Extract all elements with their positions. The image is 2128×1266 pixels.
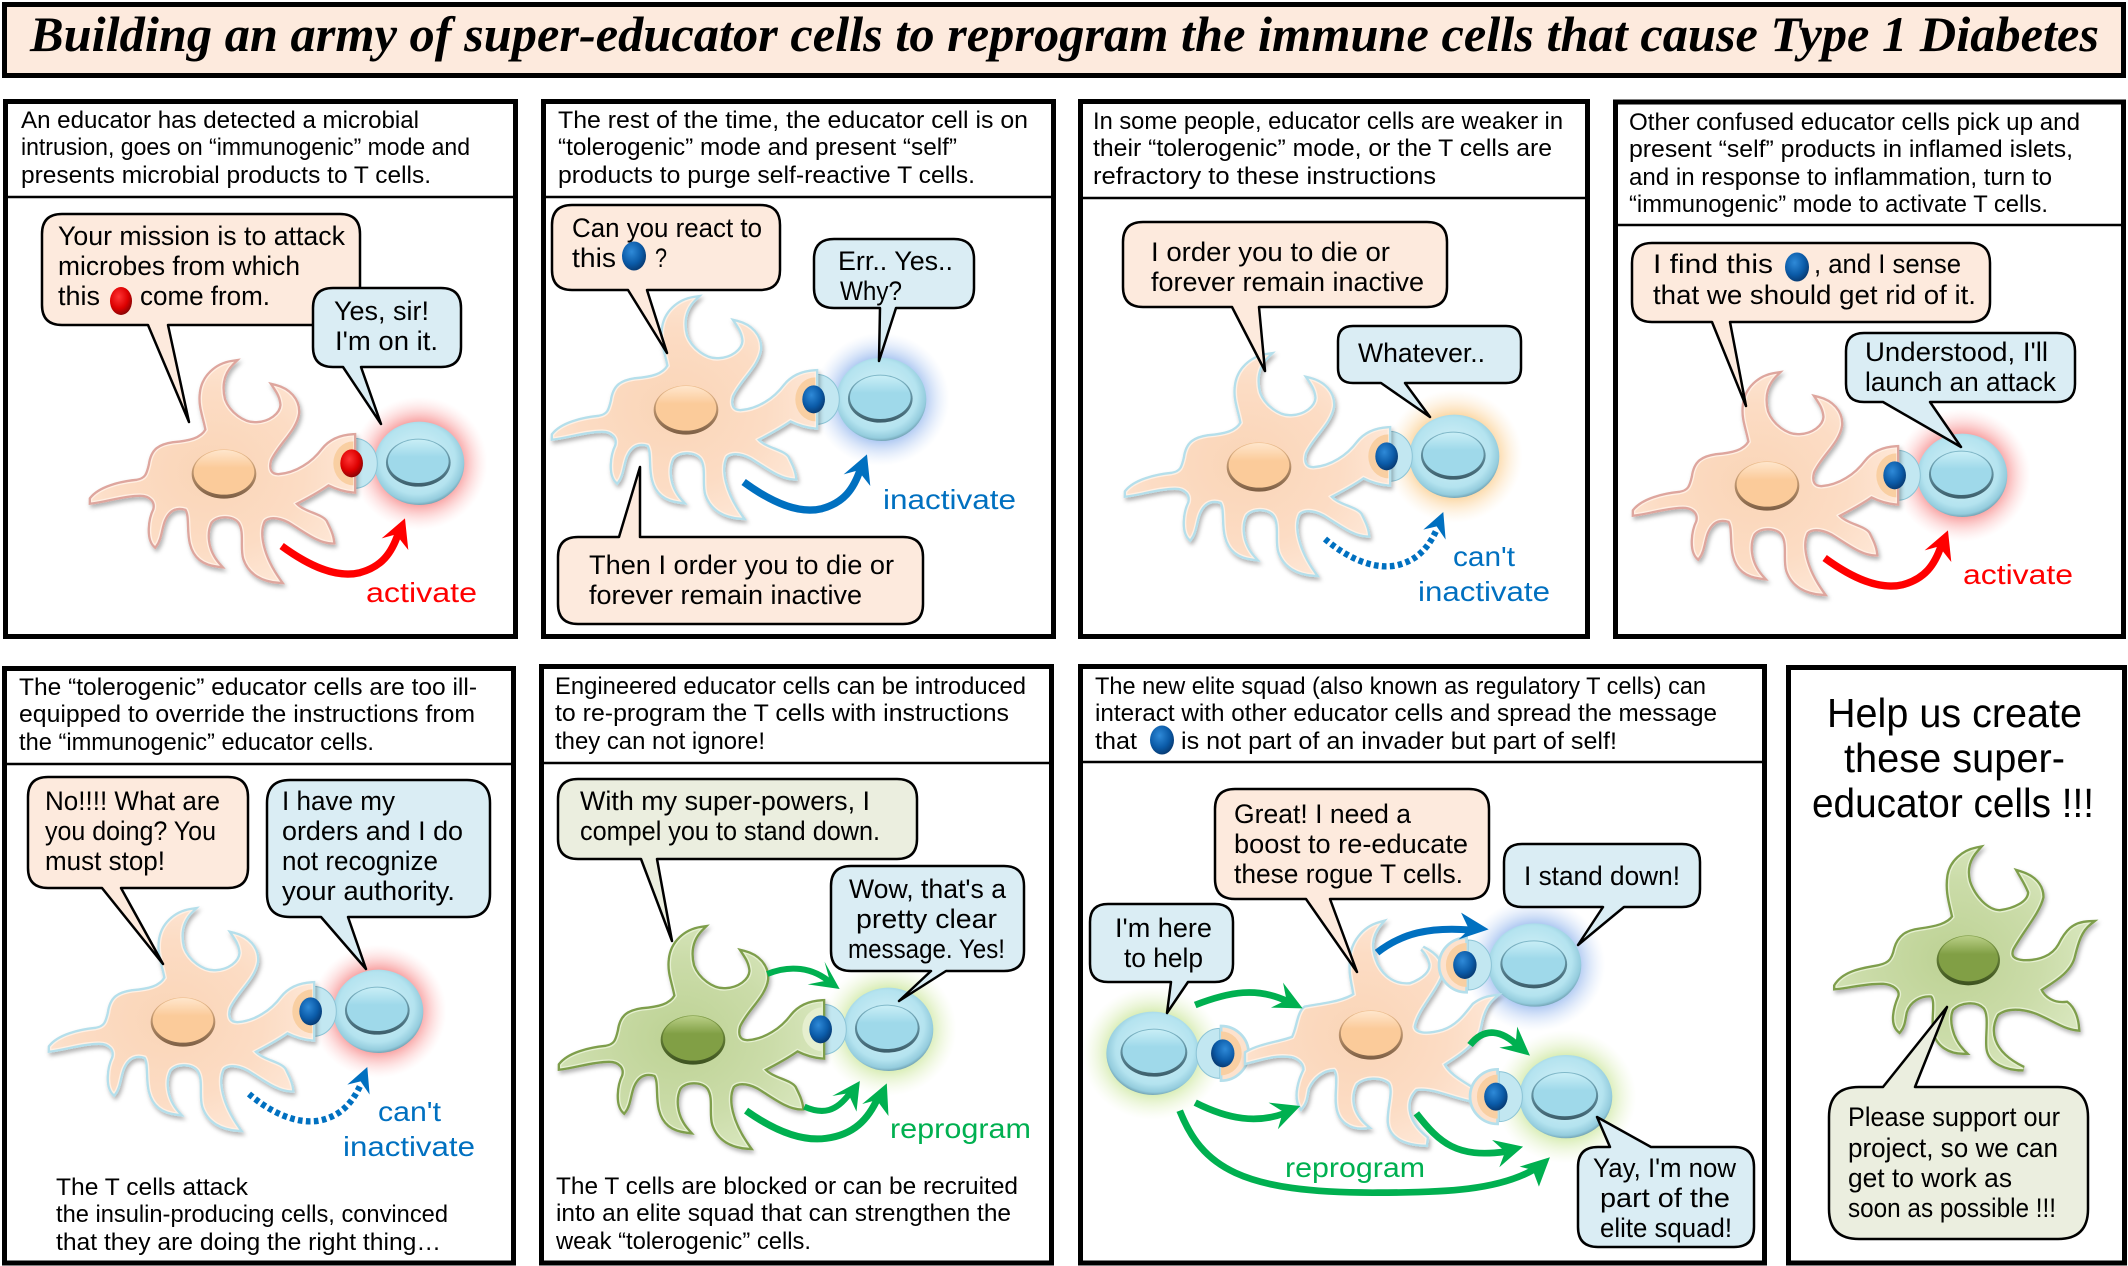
speech bubble: order to die: I order you to die or bbox=[1151, 237, 1390, 267]
speech bubble: please support: soon as possible !!! bbox=[1848, 1193, 2056, 1223]
speech bubble: order to die bbox=[558, 467, 923, 624]
speech bubble: please support bbox=[1829, 1007, 2088, 1239]
speech bubble: order to die: forever remain inactive bbox=[1151, 267, 1424, 297]
panel: ill-equipped tolerogenic cells bbox=[4, 668, 514, 1263]
speech bubble: great boost: boost to re-educate bbox=[1234, 829, 1468, 859]
speech bubble: I have my orders: not recognize bbox=[282, 846, 438, 876]
speech bubble: I'm here to help: I'm here bbox=[1115, 913, 1212, 943]
speech bubble: wow clear message bbox=[831, 866, 1024, 1001]
speech bubble: get rid of it: I find this bbox=[1653, 249, 1773, 279]
T cell group: upper, blue glow bbox=[1464, 898, 1605, 1032]
speech bubble: elite squad: part of the bbox=[1600, 1183, 1730, 1213]
caption: educator detects microbe bbox=[21, 107, 470, 189]
label: activate: activate bbox=[1963, 559, 2073, 590]
speech bubble: can you react bbox=[552, 205, 780, 353]
speech bubble: launch an attack: Understood, I'll bbox=[1865, 337, 2048, 367]
speech bubble: super-powers: compel you to stand down. bbox=[580, 816, 880, 846]
panel: call to action bbox=[1788, 668, 2124, 1263]
caption: confused educators: present “self” products in inflamed islets, bbox=[1629, 136, 2073, 163]
caption: too ill-equipped bbox=[19, 674, 477, 756]
caption: weaker tolerogenic mode: refractory to these instructions bbox=[1093, 163, 1436, 190]
speech bubble: I have my orders: your authority. bbox=[282, 876, 455, 906]
icon: educator cell with T cell, inactivating bbox=[554, 299, 950, 517]
label: can't inactivate: can't bbox=[378, 1096, 441, 1127]
label: inactivate: inactivate bbox=[883, 484, 1016, 515]
heading: help us create: these super- bbox=[1844, 735, 2065, 781]
heading: help us create: educator cells !!! bbox=[1812, 780, 2094, 826]
speech bubble: order to die bbox=[1123, 222, 1447, 371]
label: reprogram: reprogram bbox=[1285, 1152, 1425, 1183]
speech bubble: super-powers: With my super-powers, I bbox=[580, 786, 870, 816]
speech bubble: wow clear message: message. Yes! bbox=[848, 934, 1005, 964]
caption: educator detects microbe: An educator has detected a microbial bbox=[21, 107, 419, 134]
speech bubble: wow clear message: Wow, that's a bbox=[849, 874, 1007, 904]
arrow: can't inactivate (dotted) bbox=[1325, 512, 1446, 566]
panel: engineered educator cells bbox=[542, 666, 1052, 1263]
speech bubble: no what are you doing: No!!!! What are bbox=[45, 786, 220, 816]
speech bubble: no what are you doing bbox=[28, 777, 248, 964]
speech bubble: can you react: Can you react to bbox=[572, 213, 762, 243]
caption: tolerogenic mode: The rest of the time, the educator cell is on bbox=[558, 107, 1028, 134]
speech bubble: yes sir: Yes, sir! bbox=[334, 296, 429, 326]
label: can't inactivate: inactivate bbox=[343, 1131, 475, 1162]
caption: elite squad: that bbox=[1095, 728, 1137, 755]
text: T cells attack: the insulin-producing cells, convinced bbox=[56, 1201, 448, 1228]
speech bubble: elite squad bbox=[1578, 1117, 1754, 1247]
caption: engineered cells: Engineered educator cells can be introduced bbox=[555, 673, 1026, 700]
speech bubble: whatever: Whatever.. bbox=[1358, 338, 1485, 368]
speech bubble: mission bbox=[42, 214, 360, 422]
caption: engineered cells: to re-program the T cells with instructions bbox=[555, 700, 1009, 727]
caption: too ill-equipped: equipped to override the instructions from bbox=[19, 701, 475, 728]
label: can't inactivate bbox=[1418, 541, 1550, 607]
speech bubble: I have my orders: orders and I do bbox=[282, 816, 463, 846]
label: reprogram: reprogram bbox=[890, 1113, 1031, 1144]
caption: too ill-equipped: the “immunogenic” educator cells. bbox=[19, 729, 374, 756]
caption: elite squad: interact with other educator cells and spread the message bbox=[1095, 700, 1717, 727]
caption: tolerogenic mode: products to purge self-reactive T cells. bbox=[558, 162, 975, 189]
speech bubble: mission: Your mission is to attack bbox=[58, 221, 345, 251]
speech bubble: mission: this bbox=[58, 281, 100, 311]
heading: help us create: Help us create bbox=[1827, 690, 2082, 736]
speech bubble: elite squad: elite squad! bbox=[1600, 1213, 1732, 1243]
caption: confused educators: and in response to inflammation, turn to bbox=[1629, 164, 2052, 191]
arrow: activate bbox=[1825, 530, 1951, 586]
speech bubble: please support: project, so we can bbox=[1848, 1133, 2058, 1163]
text: T cells attack: The T cells attack bbox=[56, 1174, 249, 1201]
caption: tolerogenic mode bbox=[558, 107, 1028, 189]
arrow: can't inactivate (dotted) bbox=[249, 1067, 370, 1121]
label: can't inactivate: can't bbox=[1453, 541, 1515, 572]
speech bubble: order to die: forever remain inactive bbox=[589, 580, 862, 610]
panel: microbial intrusion bbox=[6, 102, 516, 636]
label: can't inactivate bbox=[343, 1096, 475, 1162]
caption: too ill-equipped: The “tolerogenic” educator cells are too ill- bbox=[19, 674, 477, 701]
caption: tolerogenic mode: “tolerogenic” mode and present “self” bbox=[558, 134, 957, 161]
educator cell body bbox=[1247, 924, 1493, 1144]
speech bubble: wow clear message: pretty clear bbox=[856, 904, 997, 934]
speech bubble: can you react: this bbox=[572, 243, 616, 273]
speech bubble: get rid of it: that we should get rid of it. bbox=[1653, 280, 1976, 310]
speech bubble: I have my orders: I have my bbox=[282, 786, 395, 816]
speech bubble: please support: get to work as bbox=[1848, 1163, 2012, 1193]
cup: lower contact bbox=[1470, 1069, 1508, 1124]
caption: elite squad: The new elite squad (also known as regulatory T cells) can bbox=[1095, 673, 1706, 700]
arrow: inactivate bbox=[744, 454, 870, 510]
arrow: activate bbox=[282, 518, 408, 574]
caption: educator detects microbe: intrusion, goes on “immunogenic” mode and bbox=[21, 134, 470, 161]
speech bubble: whatever bbox=[1338, 326, 1521, 417]
speech bubble: mission: come from. bbox=[140, 281, 270, 311]
icon: tolerogenic educator cell with active T cell bbox=[51, 911, 447, 1129]
panel: tolerogenic mode bbox=[544, 102, 1054, 636]
speech bubble: super-powers bbox=[558, 779, 917, 941]
speech bubble: great boost: Great! I need a bbox=[1234, 799, 1412, 829]
T cell group: lower, green glow bbox=[1495, 1030, 1636, 1163]
speech bubble: mission: microbes from which bbox=[58, 251, 300, 281]
title: Building an army of super-educator cells to reprogram the immune cells that cause Type 1 Diabetes bbox=[29, 6, 2099, 62]
speech bubble: yes sir: I'm on it. bbox=[335, 326, 438, 356]
speech bubble: elite squad: Yay, I'm now bbox=[1593, 1153, 1736, 1183]
panel: weak tolerogenic mode bbox=[1080, 102, 1588, 636]
speech bubble: I'm here to help bbox=[1090, 904, 1233, 1013]
speech bubble: err yes why bbox=[814, 239, 974, 361]
T cell group: left regulatory cell, green glow bbox=[1082, 987, 1249, 1120]
icon: green super-educator cell bbox=[1836, 849, 2089, 1069]
heading: help us create bbox=[1812, 690, 2094, 826]
icon: central educator cell with three T cells bbox=[1082, 898, 1636, 1163]
label: can't inactivate: inactivate bbox=[1418, 576, 1550, 607]
speech bubble: I'm here to help: to help bbox=[1124, 943, 1203, 973]
speech bubble: err yes why: Why? bbox=[840, 276, 902, 306]
cup: upper contact bbox=[1439, 938, 1477, 992]
panel: elite squad bbox=[1080, 666, 1764, 1263]
panel: confused educator cells bbox=[1616, 102, 2124, 636]
text: T cells attack bbox=[56, 1174, 448, 1256]
speech bubble: launch an attack: launch an attack bbox=[1865, 367, 2056, 397]
icon: green engineered cell with T cell bbox=[561, 929, 957, 1147]
speech bubble: launch an attack bbox=[1846, 333, 2075, 447]
text: T cells blocked bbox=[555, 1173, 1018, 1255]
caption: confused educators: “immunogenic” mode to activate T cells. bbox=[1629, 191, 2048, 218]
icon: educator cell with refractory T cell bbox=[1127, 356, 1523, 574]
caption: confused educators: Other confused educator cells pick up and bbox=[1629, 109, 2080, 136]
speech bubble: get rid of it: , and I sense bbox=[1814, 249, 1961, 279]
caption: weaker tolerogenic mode: their “tolerogenic” mode, or the T cells are bbox=[1093, 135, 1552, 162]
caption: elite squad bbox=[1095, 673, 1717, 755]
speech bubble: please support: Please support our bbox=[1848, 1102, 2060, 1132]
speech bubble: get rid of it bbox=[1632, 243, 1990, 406]
text: T cells attack: that they are doing the right thing… bbox=[56, 1229, 441, 1256]
speech bubble: I stand down bbox=[1504, 844, 1700, 945]
speech bubble: great boost: these rogue T cells. bbox=[1234, 859, 1463, 889]
caption: confused educators bbox=[1629, 109, 2080, 218]
text: T cells blocked: The T cells are blocked or can be recruited bbox=[556, 1173, 1018, 1200]
speech bubble: I stand down: I stand down! bbox=[1524, 861, 1680, 891]
speech bubble: I have my orders bbox=[267, 780, 490, 969]
speech bubble: great boost bbox=[1215, 789, 1489, 972]
caption: elite squad: is not part of an invader but part of self! bbox=[1181, 728, 1617, 755]
caption: engineered cells: they can not ignore! bbox=[555, 728, 765, 755]
text: T cells blocked: weak “tolerogenic” cells. bbox=[555, 1228, 811, 1255]
caption: weaker tolerogenic mode bbox=[1093, 108, 1563, 190]
speech bubble: can you react: ? bbox=[655, 243, 667, 273]
arrows: signals in panel bbox=[1180, 913, 1550, 1193]
text: T cells blocked: into an elite squad that can strengthen the bbox=[556, 1200, 1011, 1227]
caption: educator detects microbe: presents microbial products to T cells. bbox=[21, 162, 431, 189]
speech bubble: yes sir bbox=[313, 288, 461, 424]
speech bubble: no what are you doing: must stop! bbox=[45, 846, 165, 876]
label: activate: activate bbox=[366, 577, 477, 608]
icon: educator cell with T cell, activating bbox=[92, 363, 488, 581]
caption: engineered cells bbox=[555, 673, 1026, 755]
caption: weaker tolerogenic mode: In some people, educator cells are weaker in bbox=[1093, 108, 1563, 135]
speech bubble: no what are you doing: you doing? You bbox=[45, 816, 216, 846]
arrows: reprogram bbox=[746, 962, 888, 1139]
speech bubble: err yes why: Err.. Yes.. bbox=[838, 246, 953, 276]
icon: educator cell activating T cell with self product bbox=[1635, 375, 2031, 593]
speech bubble: order to die: Then I order you to die or bbox=[589, 550, 894, 580]
